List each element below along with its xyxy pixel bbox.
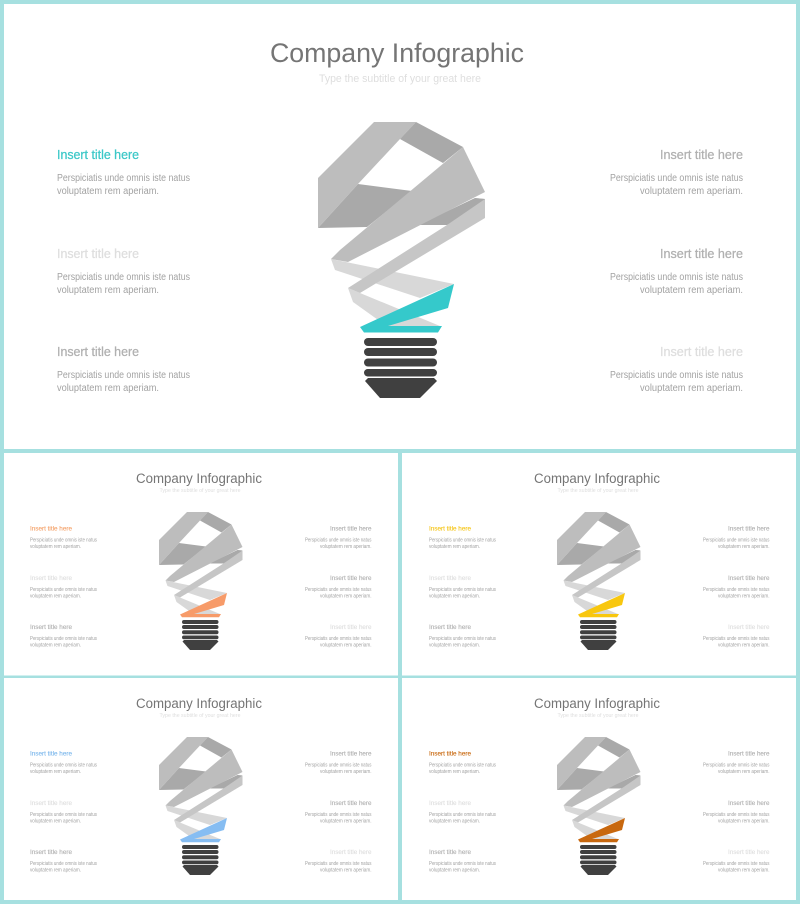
text block: left 1: voluptatem rem aperiam. <box>30 769 81 775</box>
text block: left 2: Perspiciatis unde omnis iste natus <box>30 587 97 593</box>
text block: right 3: voluptatem rem aperiam. <box>320 642 372 648</box>
text block: right 2: voluptatem rem aperiam. <box>718 818 770 824</box>
text block: left 2: voluptatem rem aperiam. <box>30 594 81 600</box>
text block: right 2: voluptatem rem aperiam. <box>718 594 770 600</box>
icon: light bulb with brown accent <box>557 737 640 875</box>
text block: left 1: Insert title here <box>429 750 472 758</box>
title: Company Infographic <box>136 696 262 711</box>
text block: right 2: Insert title here <box>660 247 743 261</box>
text block: left 1: voluptatem rem aperiam. <box>429 769 480 775</box>
text block: left 3 <box>429 849 496 874</box>
text block: left 1: Perspiciatis unde omnis iste natus <box>429 538 496 544</box>
text block: right 1: voluptatem rem aperiam. <box>640 186 743 197</box>
title: Company Infographic <box>136 471 262 486</box>
text block: right 2 <box>305 800 372 824</box>
text block: left 1: voluptatem rem aperiam. <box>57 186 159 197</box>
text block: right 1 <box>703 526 770 550</box>
text block: left 1: Perspiciatis unde omnis iste natus <box>30 762 97 768</box>
text block: right 3: Insert title here <box>330 849 372 856</box>
text block: right 3: Perspiciatis unde omnis iste natus <box>703 861 770 867</box>
text block: left 2: voluptatem rem aperiam. <box>429 818 480 824</box>
text block: left 1: Insert title here <box>30 526 73 532</box>
text block: left 2: Insert title here <box>429 800 472 807</box>
text block: left 3: Insert title here <box>429 624 472 631</box>
text block: right 1: voluptatem rem aperiam. <box>718 544 770 550</box>
text block: right 2: voluptatem rem aperiam. <box>640 285 743 296</box>
text block: left 2: voluptatem rem aperiam. <box>429 594 480 600</box>
panel: orange slide <box>4 453 398 676</box>
text block: right 3: Insert title here <box>728 849 770 856</box>
text block: left 3: Perspiciatis unde omnis iste natus <box>30 861 97 867</box>
text block: left 3: voluptatem rem aperiam. <box>30 868 81 874</box>
text block: left 3: voluptatem rem aperiam. <box>57 383 159 394</box>
text block: right 1: Perspiciatis unde omnis iste natus <box>610 173 743 184</box>
text block: right 1: voluptatem rem aperiam. <box>320 769 372 775</box>
text block: right 3: Perspiciatis unde omnis iste natus <box>703 636 770 642</box>
text block: right 3: Insert title here <box>660 345 743 359</box>
text block: right 3 <box>703 624 770 648</box>
text block: right 2 <box>610 247 743 296</box>
text block: right 3: voluptatem rem aperiam. <box>640 383 743 394</box>
text block: right 2: voluptatem rem aperiam. <box>320 818 372 824</box>
text block: left 2: Perspiciatis unde omnis iste natus <box>429 812 496 818</box>
subtitle: Type the subtitle of your great here <box>160 488 240 494</box>
text block: left 2 <box>429 800 496 824</box>
title: Company Infographic <box>534 696 660 711</box>
text block: right 3 <box>305 849 372 874</box>
text block: right 2: Perspiciatis unde omnis iste natus <box>610 272 743 283</box>
text block: right 3: Insert title here <box>728 624 770 631</box>
text block: right 2: Perspiciatis unde omnis iste natus <box>703 587 770 593</box>
text block: left 1: voluptatem rem aperiam. <box>30 544 81 550</box>
text block: left 3 <box>429 624 496 648</box>
text block: left 3 <box>30 849 97 874</box>
text block: right 3: Perspiciatis unde omnis iste natus <box>305 861 372 867</box>
subtitle: Type the subtitle of your great here <box>558 713 638 719</box>
text block: left 2: Perspiciatis unde omnis iste natus <box>30 812 97 818</box>
text block: left 3: Insert title here <box>429 849 472 856</box>
text block: right 3: Perspiciatis unde omnis iste natus <box>305 636 372 642</box>
text block: left 3: voluptatem rem aperiam. <box>429 642 480 648</box>
text block: right 2: Perspiciatis unde omnis iste natus <box>305 587 372 593</box>
text block: right 2: Insert title here <box>330 800 372 807</box>
text block: left 3: voluptatem rem aperiam. <box>429 868 480 874</box>
text block: left 3: Insert title here <box>57 345 139 359</box>
text block: left 1: Perspiciatis unde omnis iste natus <box>429 762 496 768</box>
text block: right 3: voluptatem rem aperiam. <box>718 868 770 874</box>
text block: left 1: Perspiciatis unde omnis iste natus <box>30 538 97 544</box>
text block: right 1: voluptatem rem aperiam. <box>320 544 372 550</box>
text block: left 1: Perspiciatis unde omnis iste natus <box>57 173 190 184</box>
text block: left 3 <box>30 624 97 648</box>
text block: left 1: voluptatem rem aperiam. <box>429 544 480 550</box>
text block: left 2: Insert title here <box>57 247 139 261</box>
title: Company Infographic <box>534 471 660 486</box>
text block: right 1: Insert title here <box>330 526 372 532</box>
text block: left 3: voluptatem rem aperiam. <box>30 642 81 648</box>
text block: right 2: Insert title here <box>728 800 770 807</box>
text block: left 3: Perspiciatis unde omnis iste natus <box>57 370 190 381</box>
text block: left 1 <box>30 526 97 550</box>
text block: right 2 <box>305 575 372 600</box>
text block: right 2: Perspiciatis unde omnis iste natus <box>703 812 770 818</box>
text block: left 2: Insert title here <box>30 575 73 582</box>
text block: left 1: Insert title here <box>30 750 73 758</box>
text block: right 3: Perspiciatis unde omnis iste natus <box>610 370 743 381</box>
panel: yellow slide <box>402 453 796 676</box>
text block: left 1: Insert title here <box>57 148 139 162</box>
text block: left 3: Perspiciatis unde omnis iste natus <box>429 861 496 867</box>
subtitle: Type the subtitle of your great here <box>160 713 240 719</box>
icon: light bulb with blue accent <box>159 737 242 875</box>
text block: right 2: Perspiciatis unde omnis iste natus <box>305 812 372 818</box>
text block: left 2 <box>57 247 190 296</box>
text block: left 1 <box>429 526 496 550</box>
text block: left 3: Insert title here <box>30 624 73 631</box>
text block: right 2: Insert title here <box>728 575 770 582</box>
text block: right 1 <box>305 750 372 775</box>
icon: light bulb with teal accent <box>318 122 485 398</box>
text block: right 1: Perspiciatis unde omnis iste natus <box>305 762 372 768</box>
text block: left 2: Perspiciatis unde omnis iste natus <box>429 587 496 593</box>
panel: main teal slide <box>4 4 796 449</box>
text block: right 3: voluptatem rem aperiam. <box>320 868 372 874</box>
text block: left 1: Insert title here <box>429 526 472 532</box>
text block: right 1: Insert title here <box>728 526 770 532</box>
text block: right 1: Insert title here <box>728 750 770 758</box>
text block: right 1: Perspiciatis unde omnis iste natus <box>703 538 770 544</box>
text block: right 1: Perspiciatis unde omnis iste natus <box>305 538 372 544</box>
text block: right 1: Perspiciatis unde omnis iste natus <box>703 762 770 768</box>
text block: left 3: Insert title here <box>30 849 73 856</box>
text block: left 2: Insert title here <box>429 575 472 582</box>
text block: right 2 <box>703 575 770 600</box>
text block: right 2: Insert title here <box>330 575 372 582</box>
panel: blue slide <box>4 678 398 900</box>
title: Company Infographic <box>270 38 524 68</box>
text block: left 2: voluptatem rem aperiam. <box>57 285 159 296</box>
text block: left 2: Insert title here <box>30 800 73 807</box>
text block: left 2: Perspiciatis unde omnis iste natus <box>57 272 190 283</box>
text block: right 1: voluptatem rem aperiam. <box>718 769 770 775</box>
text block: left 2 <box>429 575 496 600</box>
text block: left 1 <box>429 750 496 775</box>
icon: light bulb with yellow accent <box>557 512 640 650</box>
text block: right 3: voluptatem rem aperiam. <box>718 642 770 648</box>
text block: right 1 <box>305 526 372 550</box>
panel: brown slide <box>402 678 796 900</box>
text block: right 3 <box>610 345 743 394</box>
subtitle: Type the subtitle of your great here <box>558 488 638 494</box>
text block: right 3 <box>703 849 770 874</box>
text block: right 1 <box>610 148 743 197</box>
text block: left 2: voluptatem rem aperiam. <box>30 818 81 824</box>
text block: left 1 <box>57 148 190 197</box>
text block: right 3: Insert title here <box>330 624 372 631</box>
text block: right 1 <box>703 750 770 775</box>
text block: left 2 <box>30 575 97 600</box>
text block: left 1 <box>30 750 97 775</box>
text block: right 3 <box>305 624 372 648</box>
icon: light bulb with orange accent <box>159 512 242 650</box>
text block: right 2 <box>703 800 770 824</box>
text block: left 3: Perspiciatis unde omnis iste natus <box>429 636 496 642</box>
text block: right 1: Insert title here <box>660 148 743 162</box>
subtitle: Type the subtitle of your great here <box>319 73 481 85</box>
text block: left 2 <box>30 800 97 824</box>
text block: left 3: Perspiciatis unde omnis iste natus <box>30 636 97 642</box>
text block: left 3 <box>57 345 190 394</box>
text block: right 1: Insert title here <box>330 750 372 758</box>
text block: right 2: voluptatem rem aperiam. <box>320 594 372 600</box>
